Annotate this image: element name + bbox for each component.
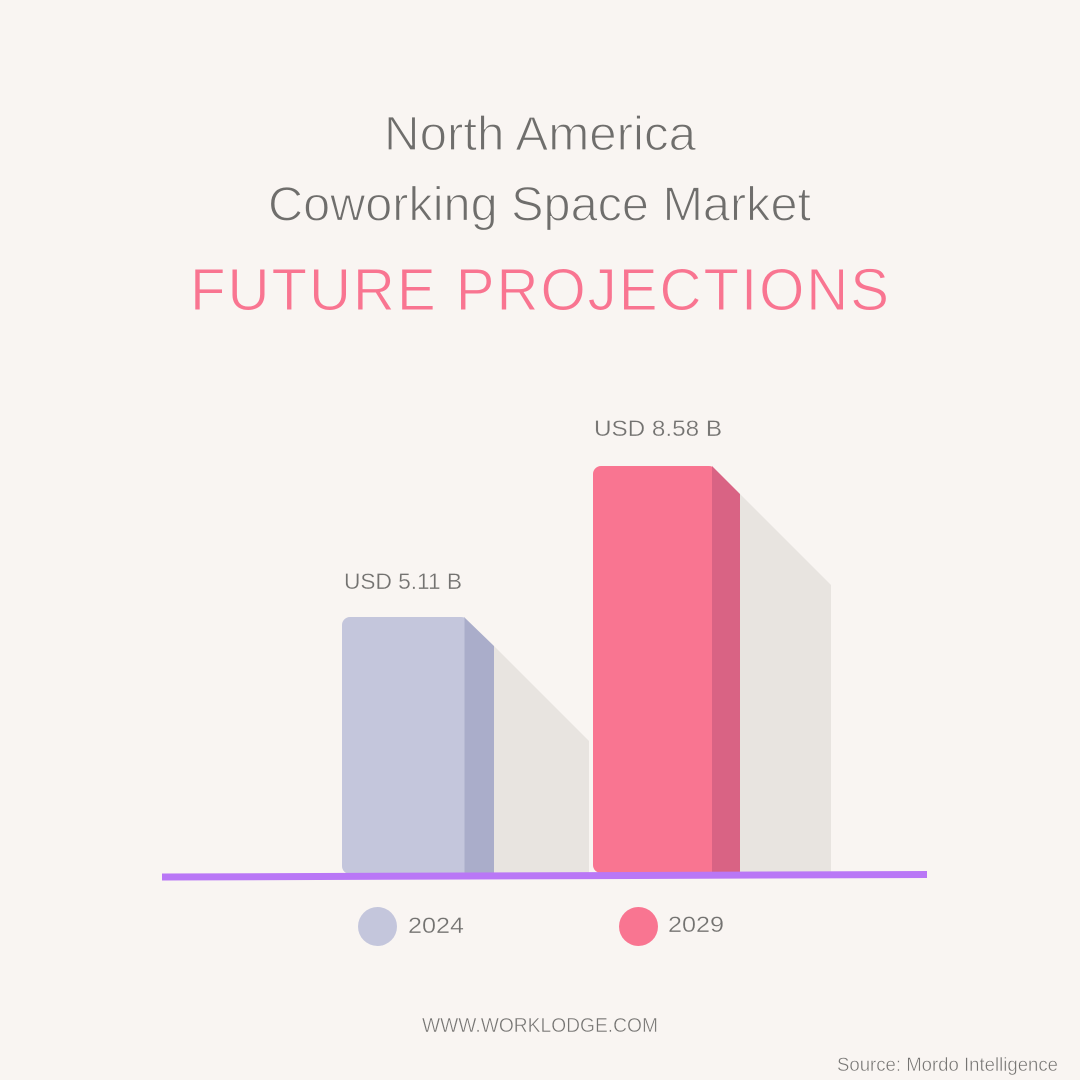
value label: 2029: USD 8.58 B [594,416,722,441]
bar front: 2029 [593,466,712,873]
bar front: 2024 [342,617,464,874]
bar shadow: 2024 [494,646,589,873]
value label: 2024: USD 5.11 B [344,569,462,594]
bar side: 2029 [712,466,740,873]
legend [358,907,724,946]
bar: 2024 [342,569,589,874]
website url: WWW.WORKLODGE.COM [422,1015,658,1037]
title line 2: Coworking Space Market [268,178,811,232]
bar chart [162,416,927,880]
source note: Source: Mordo Intelligence [837,1055,1058,1076]
bar shadow: 2029 [740,494,831,873]
legend swatch: 2024 [358,907,397,946]
legend item: 2024 [358,907,464,946]
axis line [162,871,927,880]
legend label: 2029: 2029 [668,912,724,937]
heading: future projections: FUTURE PROJECTIONS [190,257,891,323]
legend label: 2024: 2024 [408,913,464,938]
legend swatch: 2029 [619,907,658,946]
title [190,108,891,323]
legend item: 2029 [619,907,724,946]
bar side: 2024 [464,617,494,874]
bar: 2029 [593,416,831,873]
title line 1: North America [384,108,696,161]
